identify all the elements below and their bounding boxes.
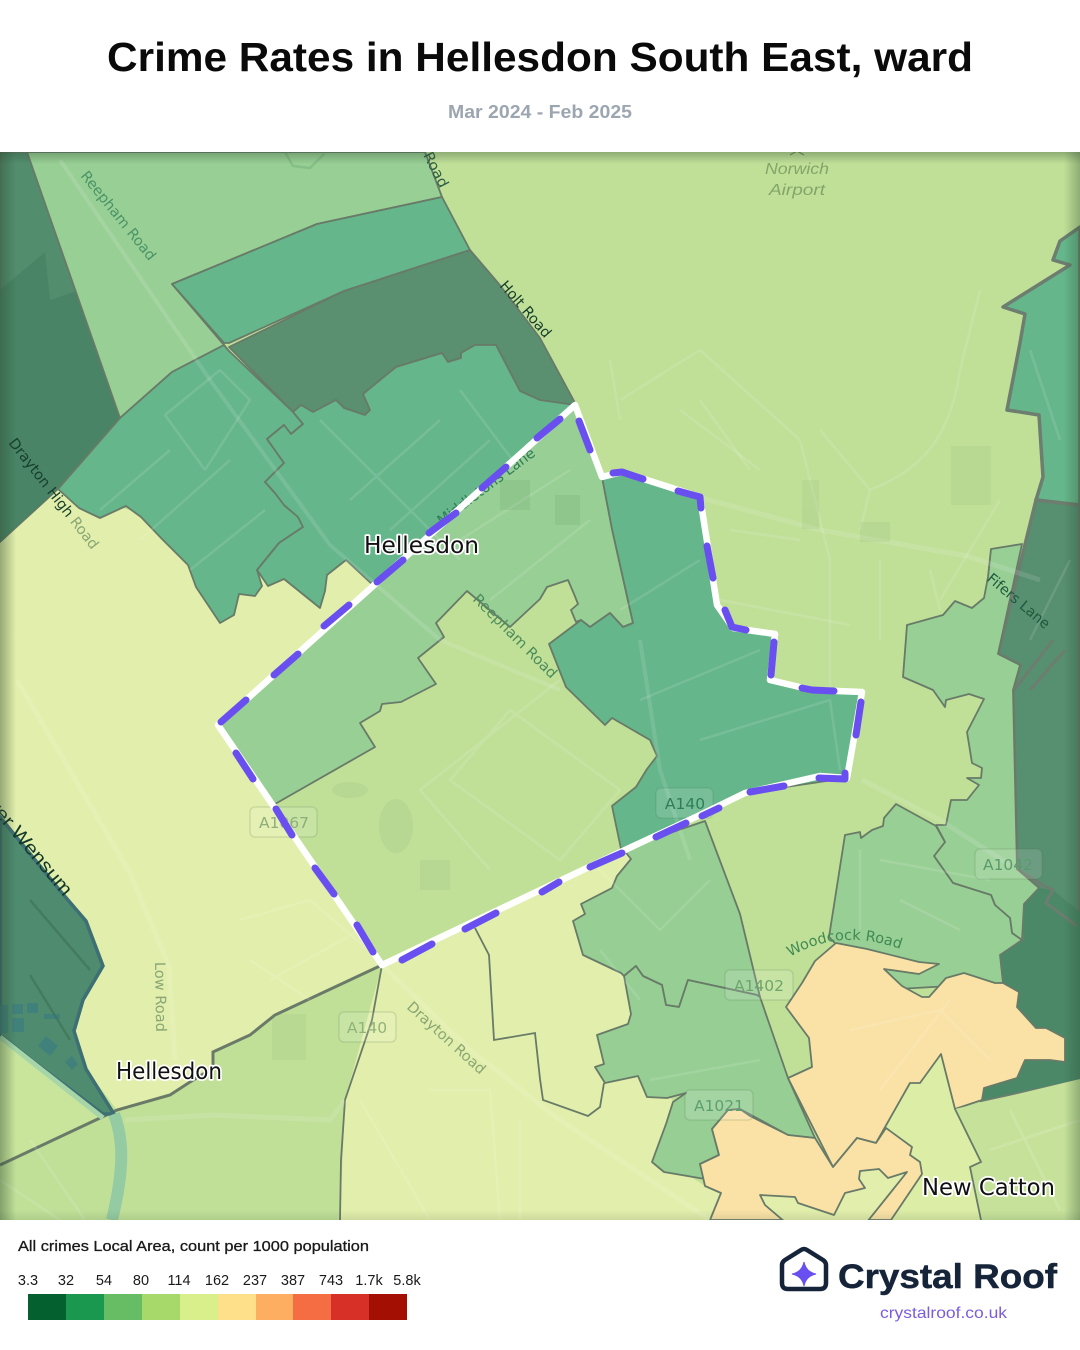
road labels: Middletons Lane	[435, 445, 539, 529]
area: ward mid green	[549, 472, 862, 849]
area: peach north	[786, 943, 1065, 1167]
road shields	[250, 788, 1042, 1120]
area: dark Holt	[229, 250, 575, 415]
choropleth map	[0, 150, 1080, 1220]
road labels: Fifers Lane	[983, 571, 1053, 633]
place labels: Hellesdon	[364, 533, 479, 559]
wordmark: Crystal Roof	[838, 1258, 1058, 1296]
area: pale east of New Catton boundary	[886, 1054, 981, 1220]
area: east dark strip	[982, 500, 1080, 1100]
road labels	[0, 150, 1053, 1078]
road shields: A1042	[983, 856, 1033, 874]
legend values: 80	[133, 1273, 149, 1289]
legend values: 162	[205, 1273, 229, 1289]
area: ward lime south part	[218, 623, 633, 965]
legend values: 743	[319, 1273, 343, 1289]
area: light north-west	[27, 152, 442, 418]
website: crystalroof.co.uk	[880, 1305, 1008, 1322]
area: light green east	[903, 544, 1039, 940]
road shields: A140	[347, 1019, 387, 1037]
area: dark west inner shade	[0, 252, 120, 542]
airport label	[765, 151, 829, 199]
legend colour scale	[28, 1294, 407, 1320]
road labels: Woodcock Road	[786, 928, 903, 956]
area: mid green north of ward	[257, 345, 575, 608]
boundary line: thick west-south	[0, 965, 382, 1165]
map base: lime area	[0, 152, 1080, 1220]
patches: woodland and parks	[272, 446, 991, 1060]
road labels: Holt Road	[496, 278, 554, 341]
road labels: Drayton Road	[403, 999, 488, 1078]
legend values: 114	[167, 1273, 191, 1289]
works: settling tanks	[0, 1003, 78, 1070]
area: river works	[0, 817, 114, 1114]
logo: Crystal Roof	[782, 1249, 1058, 1322]
road labels: Reepham Road	[469, 592, 560, 682]
area: south blob two	[595, 966, 815, 1179]
area: south-west lime	[0, 1035, 117, 1165]
area: lime south-east	[955, 1079, 1080, 1220]
area: south blob one	[573, 821, 760, 1007]
area: east mid green strip	[1003, 227, 1080, 505]
legend values	[18, 1273, 421, 1289]
place labels: Hellesdon	[116, 1059, 222, 1085]
legend values: 32	[58, 1273, 74, 1289]
area: ward light green	[218, 405, 633, 804]
road labels: Low Road	[151, 962, 168, 1032]
road shields: A1067	[259, 814, 309, 832]
area: light green south-east	[829, 804, 1022, 990]
area: east dark south	[982, 888, 1080, 1100]
legend values: 387	[281, 1273, 305, 1289]
boundary lines: south-east	[955, 1109, 981, 1220]
area: pale south	[340, 845, 721, 1220]
legend title: All crimes Local Area, count per 1000 population	[18, 1239, 369, 1255]
area: dark west	[0, 152, 120, 542]
legend values: 3.3	[18, 1273, 38, 1289]
road labels: Drayton High Road	[5, 436, 101, 553]
area: pale west	[0, 489, 410, 1110]
boundary lines: east dark strip	[1014, 640, 1077, 926]
place labels: New Catton	[922, 1175, 1055, 1201]
area: pale hole in peach	[760, 1169, 907, 1222]
place labels	[116, 533, 1055, 1201]
road shields: A1021	[694, 1097, 744, 1115]
area: mid band	[172, 197, 470, 343]
road shields: A1402	[734, 977, 784, 995]
river: water channel	[112, 1114, 121, 1220]
title: Crime Rates in Hellesdon South East, ward	[107, 34, 973, 80]
map edge vignette	[0, 152, 1080, 1220]
subtitle: date range: Mar 2024 - Feb 2025	[448, 102, 632, 122]
road shields: A140	[665, 795, 705, 813]
road labels: Reepham Road	[77, 168, 159, 264]
legend	[18, 1239, 421, 1320]
river: pale bank	[0, 1037, 103, 1118]
boundary line: south from ward corner	[340, 965, 382, 1220]
legend values: 237	[243, 1273, 267, 1289]
legend values: 1.7k	[355, 1273, 383, 1289]
icon: house with star	[782, 1249, 826, 1289]
ward boundary: Hellesdon South East	[218, 405, 862, 965]
street network	[0, 152, 1080, 1220]
legend values: 54	[96, 1273, 112, 1289]
boundary lines: south pale	[475, 928, 604, 1116]
road labels: Road	[419, 150, 451, 191]
airport label: Airport	[768, 182, 826, 199]
area: mid green west	[58, 345, 303, 623]
airport label: Norwich	[765, 161, 829, 178]
area: peach south	[700, 1109, 922, 1220]
legend values: 5.8k	[393, 1273, 421, 1289]
